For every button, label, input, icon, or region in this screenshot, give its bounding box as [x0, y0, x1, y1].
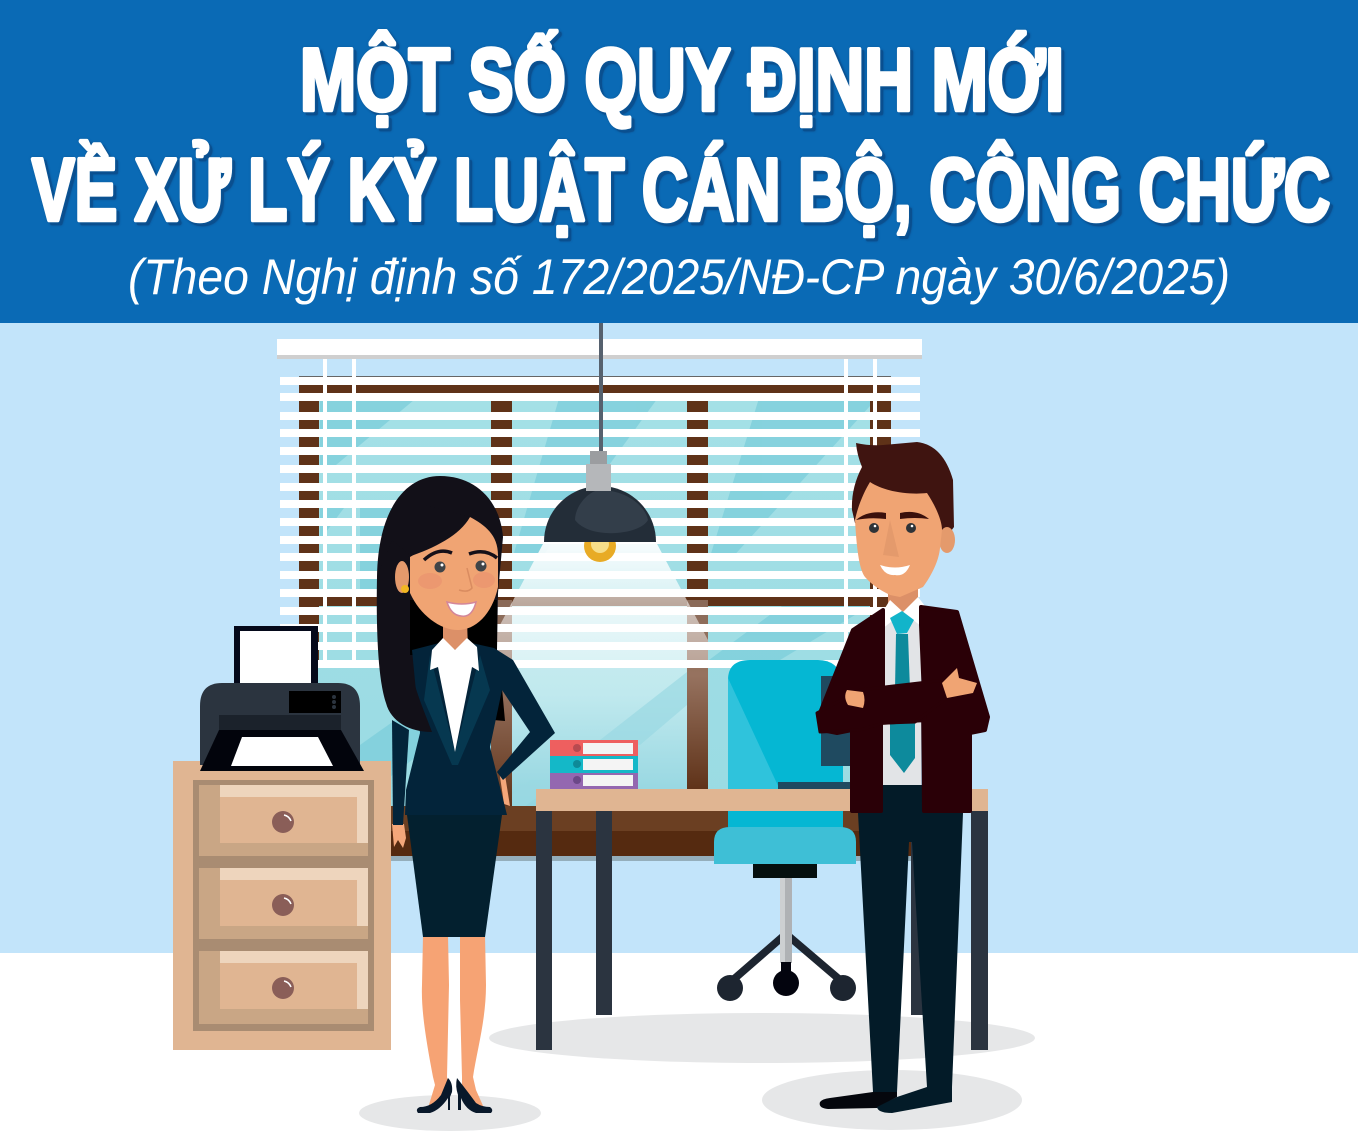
- suit jacket: [405, 642, 555, 815]
- drawer 2: [199, 868, 368, 939]
- blind slats: [280, 356, 920, 668]
- eyebrows: [856, 512, 929, 520]
- smile: [880, 565, 910, 575]
- nose: [883, 520, 899, 557]
- fringe: [408, 505, 470, 557]
- ear and earring: [395, 561, 409, 593]
- neck: [443, 620, 468, 650]
- neck: [888, 585, 918, 622]
- nose: [459, 568, 472, 591]
- face: [410, 517, 498, 630]
- smile: [447, 602, 476, 616]
- subtitle: (Theo Nghị định số 172/2025/NĐ-CP ngày 30/6/2025): [128, 249, 1230, 305]
- back hair: [377, 476, 503, 700]
- drawer 1: [199, 785, 368, 856]
- right hand: [942, 668, 977, 698]
- collar: [881, 597, 926, 630]
- floor shadows: [359, 1013, 1035, 1131]
- jacket: [820, 607, 988, 811]
- window sill: [391, 806, 915, 861]
- cheeks: [418, 572, 495, 589]
- blind head rail: [277, 339, 922, 355]
- desk: [536, 789, 988, 1050]
- filing cabinet: [173, 761, 391, 1050]
- printer: [200, 626, 364, 771]
- businesswoman: [377, 476, 555, 1113]
- right hand on hip: [499, 770, 510, 806]
- tie: [890, 611, 915, 773]
- trousers: [858, 785, 963, 1092]
- skirt: [407, 815, 502, 937]
- office chair: [714, 660, 858, 1001]
- face: [855, 482, 942, 597]
- crossed arms: [817, 680, 948, 732]
- drawer 3: [199, 951, 368, 1024]
- shoes: [820, 1087, 952, 1113]
- hair: [852, 442, 954, 543]
- high heels: [417, 1078, 492, 1113]
- left sleeve: [392, 720, 409, 825]
- businessman: [817, 442, 988, 1113]
- shirt: [883, 610, 921, 786]
- blouse: [430, 638, 479, 752]
- floor: [0, 953, 1358, 1131]
- eyes: [869, 523, 916, 533]
- front hair lock: [377, 540, 432, 732]
- wall background: [0, 323, 1358, 954]
- pendant lamp: [544, 323, 656, 562]
- eyebrows: [424, 551, 497, 560]
- left hand: [392, 824, 406, 848]
- legs: [422, 935, 486, 1108]
- ear: [939, 527, 955, 553]
- title line 1: MỘT SỐ QUY ĐỊNH MỚI: [300, 30, 1064, 129]
- folders on desk: [550, 740, 638, 789]
- eyes: [434, 560, 486, 572]
- window with blinds: [277, 339, 922, 861]
- left hand: [845, 690, 864, 708]
- light cone: [492, 542, 708, 668]
- header banner: [0, 0, 1358, 323]
